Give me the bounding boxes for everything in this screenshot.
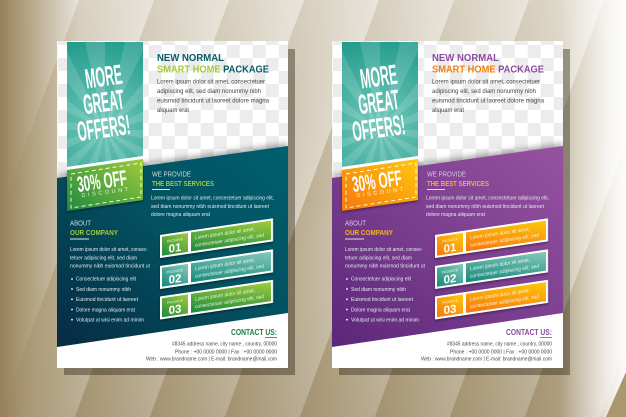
- package 03: 03: [169, 303, 181, 317]
- bullet list: Volutpat ut wisi enim ad minim: [76, 318, 145, 324]
- bullet list: Sed diam nonummy nibh: [351, 287, 406, 293]
- bullet list: Euismod tincidunt ut laoreet: [76, 297, 138, 303]
- section: we provide: WE PROVIDE: [152, 172, 191, 178]
- sunburst panel: [67, 42, 143, 167]
- bullet list: [346, 277, 420, 324]
- dark teal diagonal band: [57, 146, 288, 347]
- package 02: Lorem ipsum dolor sit amet,: [195, 257, 255, 272]
- intro text: aliquam erat: [157, 108, 189, 114]
- white footer area: [57, 311, 288, 368]
- package 03: Lorem ipsum dolor sit amet,: [195, 288, 255, 303]
- flyer: teal and green: [57, 41, 295, 375]
- contact block: CONTACT US:: [231, 328, 277, 337]
- headline: more great offers: GREAT: [81, 84, 126, 120]
- sunburst panel: [342, 42, 418, 167]
- discount badge: [67, 159, 143, 211]
- bullet list: Consectetuer adipiscing elit: [351, 277, 411, 283]
- package 03: 03: [444, 303, 456, 317]
- flyer drop shadow: [339, 49, 570, 375]
- section: we provide: sed diam nonummy nibh euismod tincidunt ut laoreet: [426, 204, 544, 210]
- flyer drop shadow: [64, 49, 295, 375]
- section: we provide: dolore magna aliquam erat: [151, 212, 210, 218]
- package 01: consectetuer adipiscing elit, sed: [195, 233, 264, 249]
- intro text: [432, 80, 545, 114]
- discount badge: [342, 159, 418, 211]
- package 01: Lorem ipsum dolor sit amet,: [195, 226, 255, 241]
- package 01: 01: [444, 242, 457, 256]
- contact block: #8345 address name, city name , country, 00000: [447, 342, 552, 348]
- package 03: consectetuer adipiscing elit, sed: [470, 294, 539, 310]
- contact block: Web : www.brandname.com | E-mail: brandname@mail.com: [421, 356, 553, 362]
- section: about our company: OUR COMPANY: [70, 230, 118, 237]
- white footer area: [332, 311, 563, 368]
- contact block: Web : www.brandname.com | E-mail: brandname@mail.com: [146, 356, 278, 362]
- package 03: PACKAGE: [167, 299, 184, 305]
- package 03: consectetuer adipiscing elit, sed: [195, 294, 264, 310]
- package 01: PACKAGE: [442, 237, 459, 243]
- sunburst panel: OFFERS!: [350, 109, 407, 147]
- contact block: [146, 328, 278, 362]
- package 02: PACKAGE: [442, 268, 459, 274]
- section: we provide: THE BEST SERVICES: [152, 181, 214, 188]
- bullet list: Volutpat ut wisi enim ad minim: [351, 318, 420, 324]
- section: we provide: sed diam nonummy nibh euismod tincidunt ut laoreet: [151, 204, 269, 210]
- headline: more great offers: MORE: [358, 59, 399, 95]
- headline: more great offers: MORE: [83, 59, 124, 95]
- section: about our company: OUR COMPANY: [345, 230, 393, 237]
- package 03: PACKAGE: [442, 299, 459, 305]
- headline: more great offers: [75, 59, 132, 147]
- photo placeholder checkerboard: [332, 41, 563, 368]
- package 02: 02: [169, 273, 181, 287]
- sunburst panel: OFFERS!: [75, 109, 132, 147]
- discount badge: 30% OFF: [75, 165, 128, 197]
- package 02: consectetuer adipiscing elit, sed: [470, 264, 539, 280]
- intro text: euismod tincidunt ut laoreet dolore magna: [432, 98, 545, 104]
- package 01: consectetuer adipiscing elit, sed: [470, 233, 539, 249]
- section: about our company: Lorem ipsum dolor sit amet, consec-: [70, 247, 148, 253]
- package 01: Lorem ipsum dolor sit amet,: [470, 226, 530, 241]
- package 02: PACKAGE: [167, 268, 184, 274]
- white strip under panel: [342, 156, 418, 170]
- intro text: adipiscing elit, sed diam nonummy nibh: [432, 89, 536, 95]
- package 01: [435, 218, 548, 258]
- intro text: adipiscing elit, sed diam nonummy nibh: [157, 89, 261, 95]
- headline: more great offers: [350, 59, 407, 147]
- section: about our company: ABOUT: [345, 220, 367, 228]
- contact block: Phone : +00 0000 0000 | Fax : +00 0000 0000: [175, 350, 277, 356]
- package 03: [160, 280, 273, 320]
- package 02: [435, 249, 548, 289]
- section: we provide: THE BEST SERVICES: [427, 181, 489, 188]
- purple diagonal band: [332, 146, 563, 347]
- package 01: 01: [169, 242, 182, 256]
- flyer: purple and orange: [332, 41, 570, 375]
- intro text: euismod tincidunt ut laoreet dolore magna: [157, 98, 270, 104]
- package 01: [160, 218, 273, 258]
- section: about our company: nonummy nibh euismod tincidunt ut: [345, 264, 426, 270]
- section: about our company: tetuer adipiscing elit, sed diam: [345, 255, 413, 261]
- title: [432, 53, 544, 76]
- discount badge: DISCOUNT: [81, 187, 129, 199]
- section: we provide: Lorem ipsum dolor sit amet, consectetuer adipiscing elit,: [151, 196, 274, 202]
- title: [157, 53, 269, 76]
- bullet list: [71, 277, 145, 324]
- package 02: 02: [444, 273, 456, 287]
- section: we provide: dolore magna aliquam erat: [426, 212, 485, 218]
- title: SMART HOME PACKAGE: [157, 64, 269, 76]
- package 03: Lorem ipsum dolor sit amet,: [470, 288, 530, 303]
- section: we provide: [426, 172, 549, 218]
- intro text: Lorem ipsum dolor sit amet, consectetuer: [432, 80, 540, 86]
- intro text: [157, 80, 270, 114]
- discount badge: DISCOUNT: [356, 187, 404, 199]
- white strip under panel: [67, 156, 143, 170]
- headline: more great offers: GREAT: [356, 84, 401, 120]
- package 03: [435, 280, 548, 320]
- intro text: Lorem ipsum dolor sit amet, consectetuer: [157, 80, 265, 86]
- section: we provide: WE PROVIDE: [427, 172, 466, 178]
- band shadow: [57, 140, 288, 178]
- section: we provide: [151, 172, 274, 218]
- bullet list: Sed diam nonummy nibh: [76, 287, 131, 293]
- package 01: PACKAGE: [167, 237, 184, 243]
- photo placeholder checkerboard: [57, 41, 288, 368]
- intro text: aliquam erat: [432, 108, 464, 114]
- title: NEW NORMAL: [432, 53, 499, 64]
- section: about our company: [345, 220, 426, 270]
- bullet list: Euismod tincidunt ut laoreet: [351, 297, 413, 303]
- title: SMART HOME PACKAGE: [432, 64, 544, 76]
- section: about our company: Lorem ipsum dolor sit amet, consec-: [345, 247, 423, 253]
- title: NEW NORMAL: [157, 53, 224, 64]
- contact block: #8345 address name, city name , country, 00000: [172, 342, 277, 348]
- section: about our company: ABOUT: [70, 220, 92, 228]
- package 02: Lorem ipsum dolor sit amet,: [470, 257, 530, 272]
- contact block: Phone : +00 0000 0000 | Fax : +00 0000 0000: [450, 350, 552, 356]
- contact block: CONTACT US:: [506, 328, 552, 337]
- contact block: [421, 328, 553, 362]
- bullet list: Dolore magna aliquam erat: [351, 307, 410, 313]
- band shadow: [332, 140, 563, 178]
- section: about our company: [70, 220, 151, 270]
- section: about our company: tetuer adipiscing elit, sed diam: [70, 255, 138, 261]
- bullet list: Dolore magna aliquam erat: [76, 307, 135, 313]
- section: we provide: Lorem ipsum dolor sit amet, consectetuer adipiscing elit,: [426, 196, 549, 202]
- package 02: consectetuer adipiscing elit, sed: [195, 264, 264, 280]
- bullet list: Consectetuer adipiscing elit: [76, 277, 136, 283]
- section: about our company: nonummy nibh euismod tincidunt ut: [70, 264, 151, 270]
- discount badge: 30% OFF: [350, 165, 403, 197]
- package 02: [160, 249, 273, 289]
